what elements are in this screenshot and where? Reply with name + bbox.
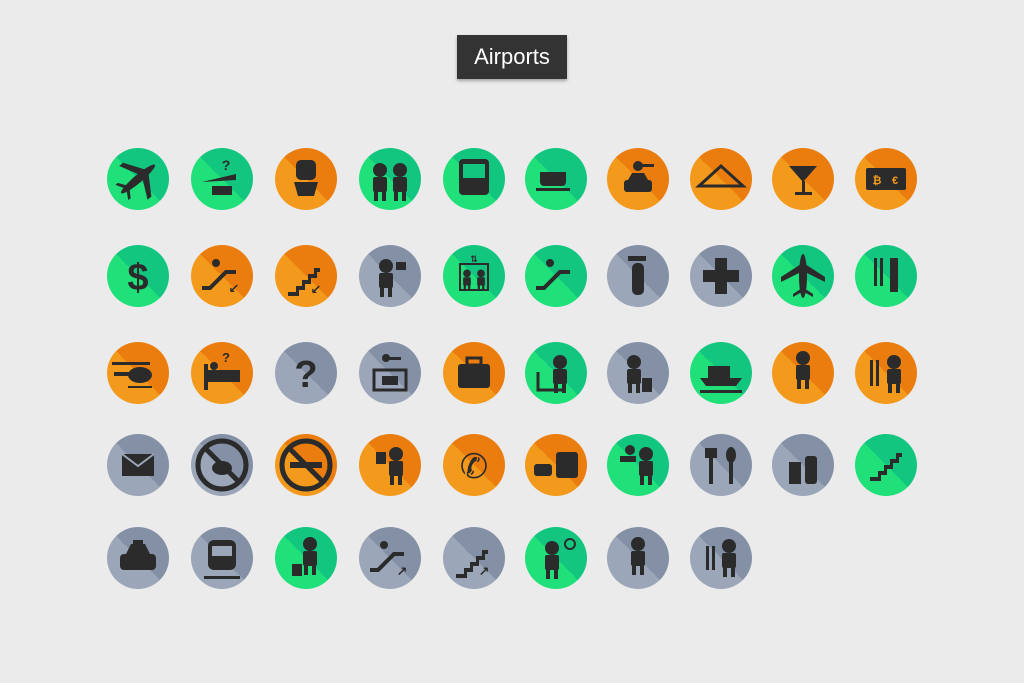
row 2: [107, 245, 917, 307]
icon: lost property: ?: [222, 157, 230, 173]
icon: ship: [690, 342, 752, 404]
icon: baby: [275, 148, 337, 210]
icon: taxi bus: [525, 434, 587, 496]
icon: hotel: [191, 342, 253, 404]
icon: airplane: [772, 245, 834, 307]
row 5: [107, 527, 752, 589]
row 3: [107, 342, 917, 404]
icon: hotel: ?: [222, 350, 230, 365]
icon: person: [772, 342, 834, 404]
icon: person info: [359, 245, 421, 307]
icon: baggage lockers: [359, 342, 421, 404]
icon: train: [191, 527, 253, 589]
icon: information: [275, 342, 337, 404]
icon: mail: [107, 434, 169, 496]
icon: currency exchange: €: [892, 175, 898, 187]
icon: currency exchange: ₿: [873, 175, 882, 187]
icon: elevator: [443, 245, 505, 307]
icon: information: ?: [294, 354, 318, 396]
icon: stairs up: ↗: [479, 564, 489, 579]
icon: passport control: [359, 434, 421, 496]
icon: baggage claim: [607, 342, 669, 404]
icon: dollar: $: [127, 257, 149, 299]
icon: car rental: [607, 148, 669, 210]
icon: stairs up: [443, 527, 505, 589]
icon: airplane: [107, 148, 169, 210]
row 4: [107, 434, 917, 496]
icon: helicopter: [107, 342, 169, 404]
icon: coffee: [525, 148, 587, 210]
icon: no pets: [191, 434, 253, 496]
icon: escalator up: ↗: [397, 564, 407, 579]
icon: waiting room: [525, 527, 587, 589]
icon: restaurant: [690, 434, 752, 496]
icon: stairs down: ↙: [311, 282, 321, 297]
icon: bus: [443, 148, 505, 210]
icon: taxi: [107, 527, 169, 589]
icon: escalator up: [359, 527, 421, 589]
icon: stairs down: [275, 245, 337, 307]
icon: drinks: [772, 434, 834, 496]
icon: stairs: [855, 434, 917, 496]
icon: escalator down: [191, 245, 253, 307]
title: Airports: [474, 44, 550, 69]
icon: women barber: [690, 527, 752, 589]
icon: first aid: [690, 245, 752, 307]
icon: check-in: [525, 342, 587, 404]
icon: currency exchange: [855, 148, 917, 210]
icon: phone: ✆: [460, 448, 488, 486]
icon: luggage: [443, 342, 505, 404]
icon: barber: [855, 245, 917, 307]
icon: toilets: [359, 148, 421, 210]
icon: escalator down: ↙: [229, 281, 239, 296]
icon: elevator: ⇅: [470, 254, 478, 264]
row 1: [107, 148, 917, 210]
icon: meeting point: [607, 434, 669, 496]
icon: cocktail: [772, 148, 834, 210]
icon: lost property: [191, 148, 253, 210]
icon: no smoking: [275, 434, 337, 496]
icon: fire extinguisher: [607, 245, 669, 307]
icon: dollar: [107, 245, 169, 307]
icon: barber person: [855, 342, 917, 404]
icon: coat hanger: [690, 148, 752, 210]
icon: escalator: [525, 245, 587, 307]
icon: phone: [443, 434, 505, 496]
icon: women: [607, 527, 669, 589]
title: [457, 35, 567, 79]
icon: trash: [275, 527, 337, 589]
